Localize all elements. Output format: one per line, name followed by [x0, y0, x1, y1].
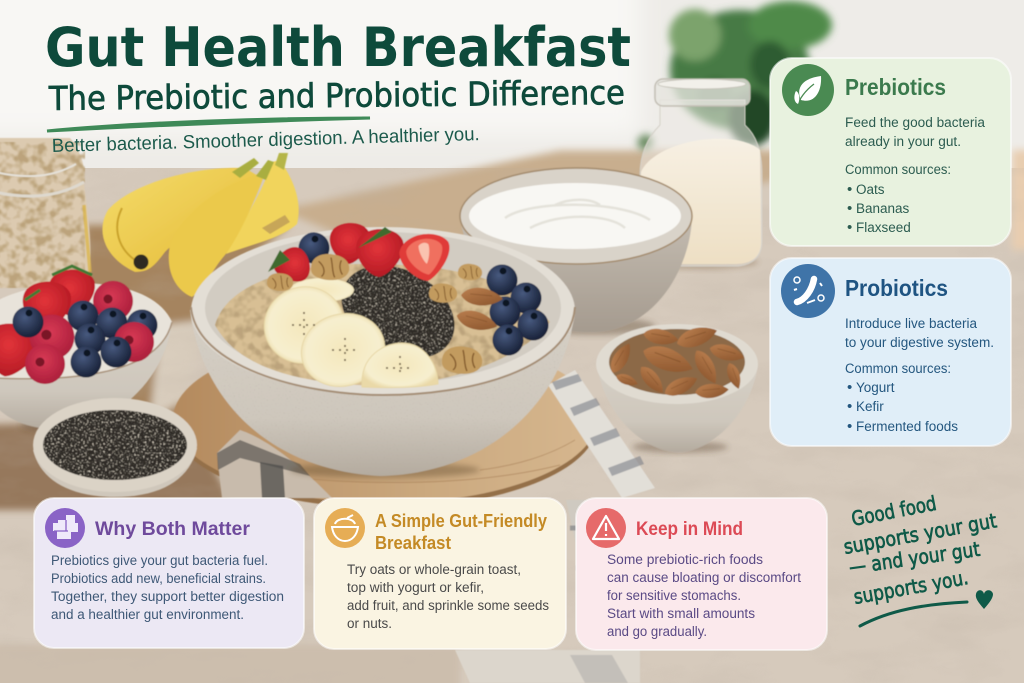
towel [217, 370, 655, 683]
text: prebiotics body: • [847, 181, 852, 198]
text: prebiotics body [845, 115, 985, 236]
underline stroke [860, 602, 967, 626]
text: probiotics body: • [847, 398, 852, 415]
icon: heart [976, 590, 993, 609]
callout: handwritten note [842, 491, 999, 626]
text: probiotics body: Yogurt [856, 380, 895, 395]
text: prebiotics body: • [847, 200, 852, 217]
text: prebiotics body: • [847, 219, 852, 236]
text: keep in mind body: Start with small amounts [607, 606, 755, 621]
panel: keep in mind [576, 498, 827, 650]
text: why both body [51, 553, 284, 622]
bananas [102, 153, 299, 297]
text: why both body: and a healthier gut environment. [51, 607, 244, 622]
icon: warning [586, 508, 626, 548]
text: probiotics body: Common sources: [845, 361, 951, 376]
icon: leaf [782, 64, 834, 116]
heading: keep in mind: Keep in Mind [636, 519, 743, 540]
text: keep in mind body [607, 552, 801, 639]
text: prebiotics body: already in your gut. [845, 134, 961, 149]
main oatmeal bowl [190, 223, 575, 478]
text: prebiotics body: Feed the good bacteria [845, 115, 985, 130]
brush underline [47, 118, 370, 131]
yogurt bowl [460, 168, 692, 335]
text: probiotics body: Introduce live bacteria [845, 316, 977, 331]
icon: bacteria [781, 264, 835, 318]
text: why both body: Probiotics add new, beneficial strains. [51, 571, 266, 586]
chia pile [325, 247, 471, 377]
text: probiotics body: Fermented foods [856, 419, 958, 434]
strawberries and berries on top [267, 223, 548, 374]
text: breakfast body: Try oats or whole-grain toast, [347, 562, 521, 577]
text: prebiotics body: Common sources: [845, 162, 951, 177]
title haze [0, 0, 640, 135]
chia bowl [33, 398, 197, 497]
panel: simple breakfast [314, 498, 566, 649]
title: Gut Health Breakfast [45, 16, 631, 79]
text: keep in mind body: Some prebiotic-rich foods [607, 552, 763, 567]
text: keep in mind body: and go gradually. [607, 624, 707, 639]
heading: simple breakfast [375, 510, 548, 553]
callout: handwritten note: Good food [849, 491, 938, 531]
text: breakfast body: or nuts. [347, 616, 392, 631]
heading: why both matter: Why Both Matter [95, 519, 251, 540]
cutting board [173, 335, 597, 508]
text: breakfast body: add fruit, and sprinkle some seeds [347, 598, 549, 613]
text: why both body: Prebiotics give your gut bacteria fuel. [51, 553, 268, 568]
text: keep in mind body: for sensitive stomachs. [607, 588, 741, 603]
plant [637, 1, 832, 150]
subtitle: The Prebiotic and Probiotic Difference [48, 73, 625, 118]
panel: why both matter [34, 498, 304, 648]
heading: simple breakfast: A Simple Gut-Friendly [375, 510, 548, 531]
text: prebiotics body: Oats [856, 182, 885, 197]
text: probiotics body: to your digestive system. [845, 335, 994, 350]
callout: handwritten note: supports your gut [842, 508, 999, 559]
text: prebiotics body: Flaxseed [856, 220, 911, 235]
almond bowl [596, 322, 758, 453]
panel: prebiotics [770, 58, 1011, 246]
text: breakfast body: top with yogurt or kefir, [347, 580, 484, 595]
heading: simple breakfast: Breakfast [375, 532, 451, 553]
icon: bowl [325, 508, 365, 548]
callout: handwritten note: — and your gut [847, 537, 982, 579]
heading: probiotics: Probiotics [845, 275, 948, 301]
text: probiotics body [845, 316, 994, 435]
text: prebiotics body: Bananas [856, 201, 910, 216]
panel: probiotics [770, 258, 1011, 446]
callout: handwritten note: supports you. [852, 565, 970, 609]
heading: prebiotics: Prebiotics [845, 74, 946, 100]
banana slices [253, 276, 438, 396]
icon: puzzle [45, 508, 85, 548]
tagline: Better bacteria. Smoother digestion. A healthier you. [52, 124, 480, 157]
text: breakfast body [347, 562, 549, 631]
text: keep in mind body: can cause bloating or discomfort [607, 570, 801, 585]
text: probiotics body: • [847, 379, 852, 396]
milk jar [640, 79, 762, 269]
text: probiotics body: Kefir [856, 399, 884, 414]
text: probiotics body: • [847, 418, 852, 435]
oats jar [0, 138, 91, 288]
berry bowl [0, 266, 172, 433]
text: why both body: Together, they support better digestion [51, 589, 284, 604]
